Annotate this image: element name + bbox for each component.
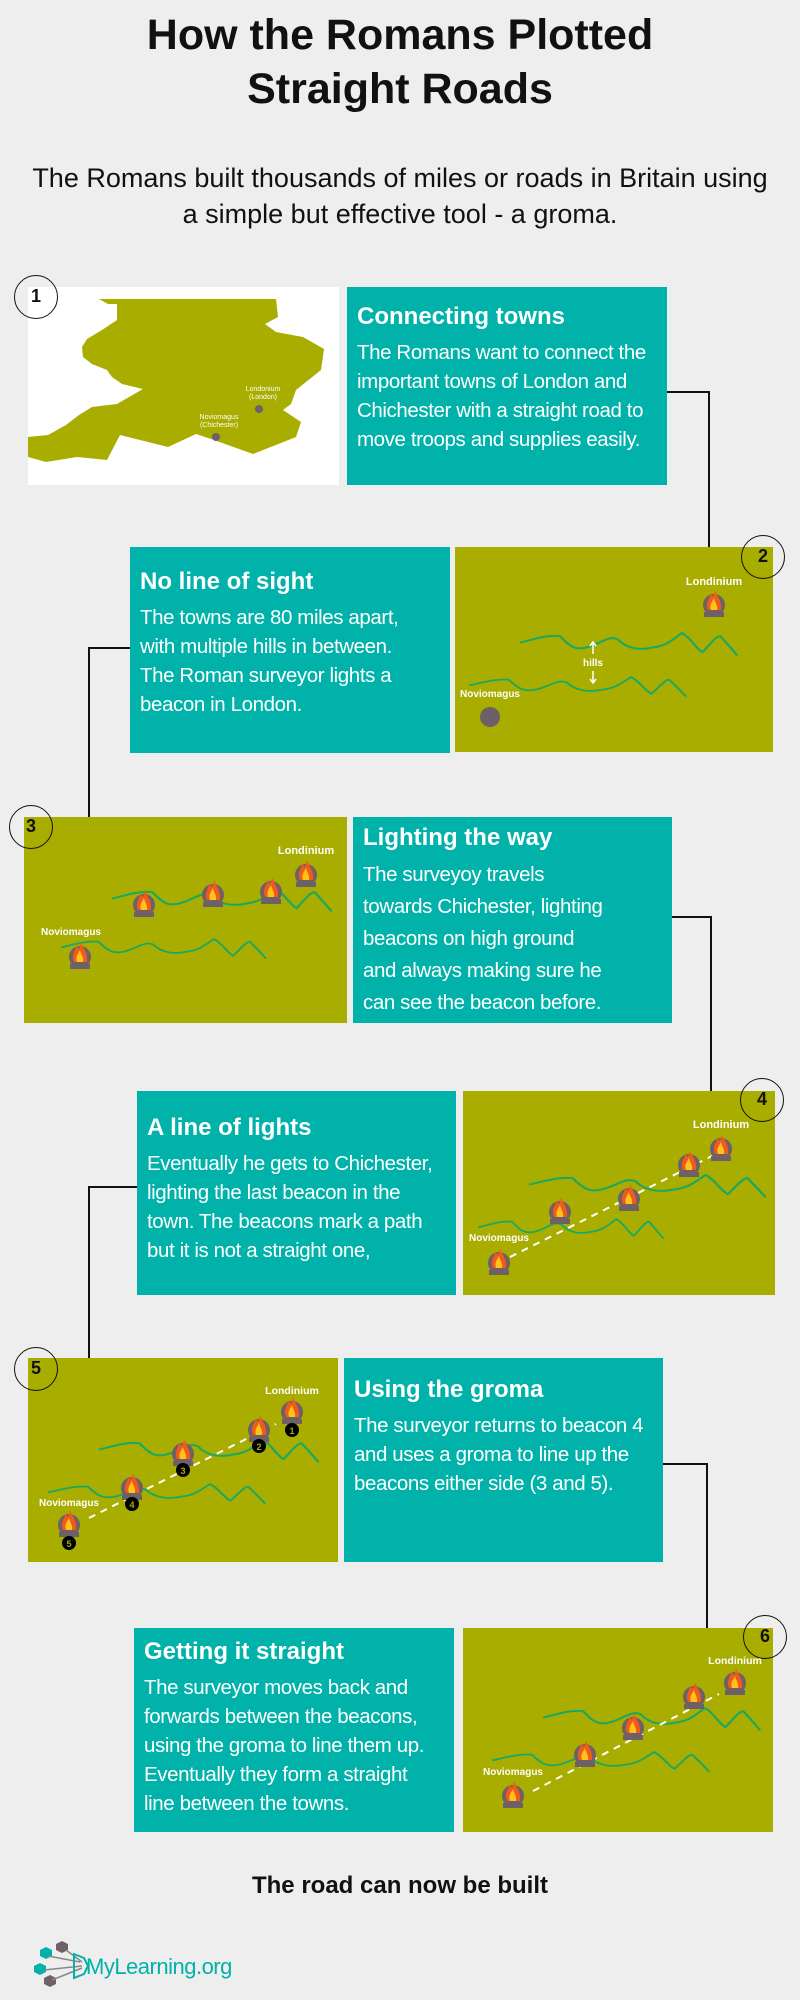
panel 5 text: and uses a groma to line up the [354, 1443, 629, 1466]
panel 4 text: A line of lights [147, 1114, 311, 1141]
panel 5 scene: Noviomagus [39, 1498, 99, 1509]
badge 3: 3 [26, 816, 36, 836]
subtitle: a simple but effective tool - a groma. [183, 199, 617, 229]
panel 2 text: No line of sight [140, 568, 313, 595]
panel 5 text: beacons either side (3 and 5). [354, 1472, 613, 1495]
panel 4 text: lighting the last beacon in the [147, 1181, 400, 1204]
panel 5 scene: 4 [129, 1500, 135, 1510]
badge 1 [14, 275, 58, 319]
subtitle: The Romans built thousands of miles or roads in Britain using [32, 163, 768, 193]
panel 2 text [130, 547, 450, 753]
panel 2 scene: Noviomagus [460, 689, 520, 700]
panel 5 scene: 2 [256, 1442, 262, 1452]
panel 2 text: with multiple hills in between. [140, 635, 392, 658]
panel 6 text: using the groma to line them up. [144, 1734, 424, 1757]
badge 3 [9, 805, 53, 849]
panel 1 text: important towns of London and [357, 370, 627, 393]
panel 1 map: (London) [249, 394, 277, 401]
badge 1: 1 [31, 286, 41, 306]
panel 6 text: Eventually they form a straight [144, 1763, 407, 1786]
panel 5 scene: 3 [180, 1466, 186, 1476]
closing line: The road can now be built [252, 1872, 548, 1899]
panel 1 text: The Romans want to connect the [357, 341, 646, 364]
panel 4 text: town. The beacons mark a path [147, 1210, 422, 1233]
badge 5: 5 [31, 1358, 41, 1378]
title: How the Romans Plotted [147, 11, 653, 59]
panel 6 scene [463, 1628, 773, 1832]
logo [34, 1941, 232, 1987]
panel 3 scene: Noviomagus [41, 927, 101, 938]
panel 1 map: (Chichester) [200, 422, 238, 429]
panel 1 map [28, 287, 339, 485]
panel 6 text: line between the towns. [144, 1792, 349, 1815]
panel 3 text: beacons on high ground [363, 927, 574, 950]
panel 5 text: Using the groma [354, 1376, 543, 1403]
panel 4 scene: Noviomagus [469, 1233, 529, 1244]
title [147, 11, 653, 113]
panel 4 text: but it is not a straight one, [147, 1239, 370, 1262]
panel 2 scene: hills [583, 658, 603, 669]
panel 3 text [353, 817, 672, 1023]
panel 3 text: towards Chichester, lighting [363, 895, 602, 918]
title: Straight Roads [247, 65, 553, 113]
panel 5 scene: 1 [289, 1426, 295, 1436]
panel 5 scene [28, 1358, 338, 1562]
badge 5 [14, 1347, 58, 1391]
panel 2 text: The towns are 80 miles apart, [140, 606, 398, 629]
panel 6 text [134, 1628, 454, 1832]
panel 4 scene [463, 1091, 775, 1295]
badge 6: 6 [760, 1626, 770, 1646]
panel 1 map: Noviomagus [200, 414, 239, 421]
badge 2: 2 [758, 546, 768, 566]
badge 4 [740, 1078, 784, 1122]
panel 2 text: The Roman surveyor lights a [140, 664, 391, 687]
badge 4: 4 [757, 1089, 767, 1109]
panel 4 text: Eventually he gets to Chichester, [147, 1152, 432, 1175]
panel 5 scene: 5 [66, 1539, 72, 1549]
subtitle [32, 163, 768, 229]
panel 3 scene: Londinium [278, 845, 334, 857]
panel 3 text: can see the beacon before. [363, 991, 601, 1014]
panel 5 text [344, 1358, 663, 1562]
panel 2 text: beacon in London. [140, 693, 302, 716]
panel 1 map: Londonium [246, 386, 280, 393]
badge 2 [741, 535, 785, 579]
panel 5 text: The surveyor returns to beacon 4 [354, 1414, 643, 1437]
panel 3 text: Lighting the way [363, 824, 552, 851]
panel 2 scene [455, 547, 773, 752]
panel 3 scene [24, 817, 347, 1023]
panel 6 scene: Noviomagus [483, 1767, 543, 1778]
panel 6 text: forwards between the beacons, [144, 1705, 417, 1728]
panel 3 text: The surveyoy travels [363, 863, 544, 886]
panel 2 scene: Londinium [686, 576, 742, 588]
panel 1 text [347, 287, 667, 485]
panel 6 text: Getting it straight [144, 1638, 344, 1665]
panel 6 text: The surveyor moves back and [144, 1676, 408, 1699]
panel 1 text: Chichester with a straight road to [357, 399, 643, 422]
panel 5 scene: Londinium [265, 1385, 319, 1397]
panel 3 text: and always making sure he [363, 959, 601, 982]
panel 6 scene: Londinium [708, 1655, 762, 1667]
panel 4 text [137, 1091, 456, 1295]
badge 6 [743, 1615, 787, 1659]
panel 4 scene: Londinium [693, 1119, 749, 1131]
panel 1 text: Connecting towns [357, 303, 565, 330]
panel 1 text: move troops and supplies easily. [357, 428, 640, 451]
logo: MyLearning.org [86, 1954, 232, 1979]
